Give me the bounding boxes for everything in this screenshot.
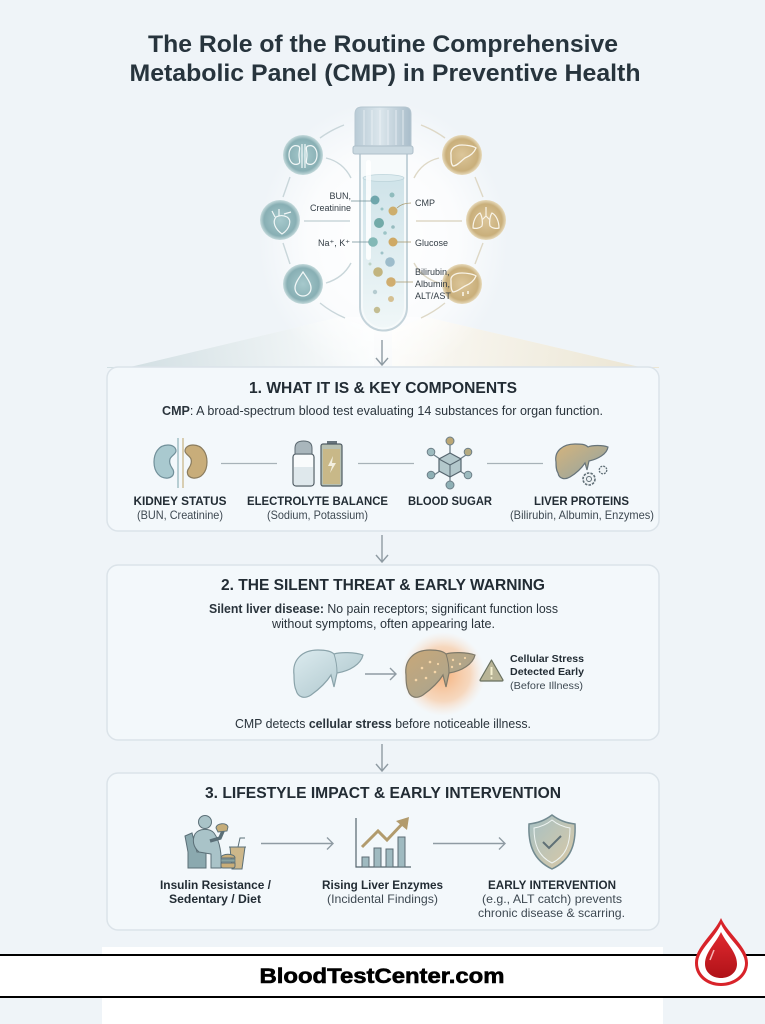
panel 1: what it is and key components — [107, 367, 659, 531]
step labels: (Incidental Findings) — [327, 892, 438, 906]
step labels: Rising Liver Enzymes — [322, 878, 443, 892]
description: without symptoms, often appearing late. — [271, 617, 495, 631]
icon: liver with gears — [556, 444, 608, 485]
arrow: panel 1 to panel 2 — [376, 535, 388, 562]
heading 1: 1. WHAT IT IS & KEY COMPONENTS — [249, 380, 517, 397]
component labels: (Bilirubin, Albumin, Enzymes) — [510, 508, 654, 522]
component labels: KIDNEY STATUS — [134, 494, 226, 508]
tube labels: CMP — [415, 198, 435, 208]
arrow: hero to panel 1 — [376, 340, 388, 365]
arrow: enzymes to intervention — [433, 838, 505, 850]
panel 2: silent threat and early warning — [107, 565, 659, 740]
icon: shield with check — [529, 815, 575, 869]
icon: salt shaker — [293, 441, 314, 486]
connector arcs — [283, 125, 483, 318]
step labels: chronic disease & scarring. — [478, 906, 625, 920]
icon: rising bar chart — [356, 817, 411, 867]
title: The Role of the Routine Comprehensive — [148, 31, 618, 58]
description: CMP: A broad-spectrum blood test evaluating 14 substances for organ function. — [162, 404, 603, 418]
component labels: (BUN, Creatinine) — [137, 508, 223, 522]
callout: cellular stress: Detected Early — [510, 666, 584, 678]
component labels — [134, 494, 654, 522]
icon: drop — [283, 264, 323, 304]
step labels: (e.g., ALT catch) prevents — [482, 892, 622, 906]
step labels — [160, 878, 625, 920]
icon: sedentary person with food — [185, 816, 246, 869]
biomarker particles — [368, 192, 398, 313]
icon: lungs — [466, 200, 506, 240]
test tube body — [360, 152, 407, 330]
arrow: healthy to stressed — [365, 668, 396, 680]
component labels: LIVER PROTEINS — [534, 494, 629, 508]
component labels: BLOOD SUGAR — [408, 494, 492, 508]
light rays from tube — [107, 100, 659, 380]
title — [130, 31, 640, 87]
callout: cellular stress — [510, 653, 584, 692]
hero: test tube with biomarker icons — [260, 107, 506, 330]
tube labels: Na⁺, K⁺ — [318, 238, 350, 248]
tube labels: BUN, — [329, 191, 351, 201]
step labels: Sedentary / Diet — [169, 892, 261, 906]
heading 3: 3. LIFESTYLE IMPACT & EARLY INTERVENTION — [205, 785, 561, 802]
panel 3: lifestyle impact and early intervention — [107, 773, 659, 930]
tube labels: Albumin, — [415, 279, 450, 289]
icon: damaged liver — [442, 264, 482, 304]
icon: liver — [442, 135, 482, 175]
footer banner — [0, 954, 765, 998]
icon: kidneys — [283, 135, 323, 175]
summary line: CMP detects cellular stress before noticeable illness. — [235, 717, 531, 731]
icon: healthy liver — [294, 650, 363, 697]
step labels: EARLY INTERVENTION — [488, 878, 616, 892]
tube labels — [310, 191, 451, 301]
title: Metabolic Panel (CMP) in Preventive Health — [130, 60, 640, 87]
footer white block — [102, 947, 663, 1024]
tube labels: ALT/AST — [415, 291, 451, 301]
icon: kidneys — [154, 438, 207, 488]
footer banner: BloodTestCenter.com — [260, 965, 504, 988]
step labels: Insulin Resistance / — [160, 878, 272, 892]
connector lines — [221, 462, 543, 464]
component labels: (Sodium, Potassium) — [267, 508, 368, 522]
heading 2: 2. THE SILENT THREAT & EARLY WARNING — [221, 577, 545, 594]
test tube cap — [353, 107, 413, 154]
callout: cellular stress: (Before Illness) — [510, 680, 583, 692]
icon: stressed liver with glow — [401, 632, 485, 716]
component labels: ELECTROLYTE BALANCE — [247, 494, 388, 508]
description: Silent liver disease: No pain receptors; significant function loss — [209, 602, 558, 616]
description — [209, 602, 558, 631]
tube labels: Bilirubin, — [415, 267, 450, 277]
callout: cellular stress: Cellular Stress — [510, 653, 584, 665]
icon: warning triangle — [480, 660, 503, 681]
tube labels: Glucose — [415, 238, 448, 248]
icon: heart — [260, 200, 300, 240]
arrow: lifestyle to enzymes — [261, 838, 333, 850]
arrow: panel 2 to panel 3 — [376, 744, 388, 771]
icon: battery — [321, 441, 342, 486]
logo: blood drop — [695, 918, 748, 986]
tube labels: Creatinine — [310, 203, 351, 213]
icon: molecule — [427, 437, 472, 489]
